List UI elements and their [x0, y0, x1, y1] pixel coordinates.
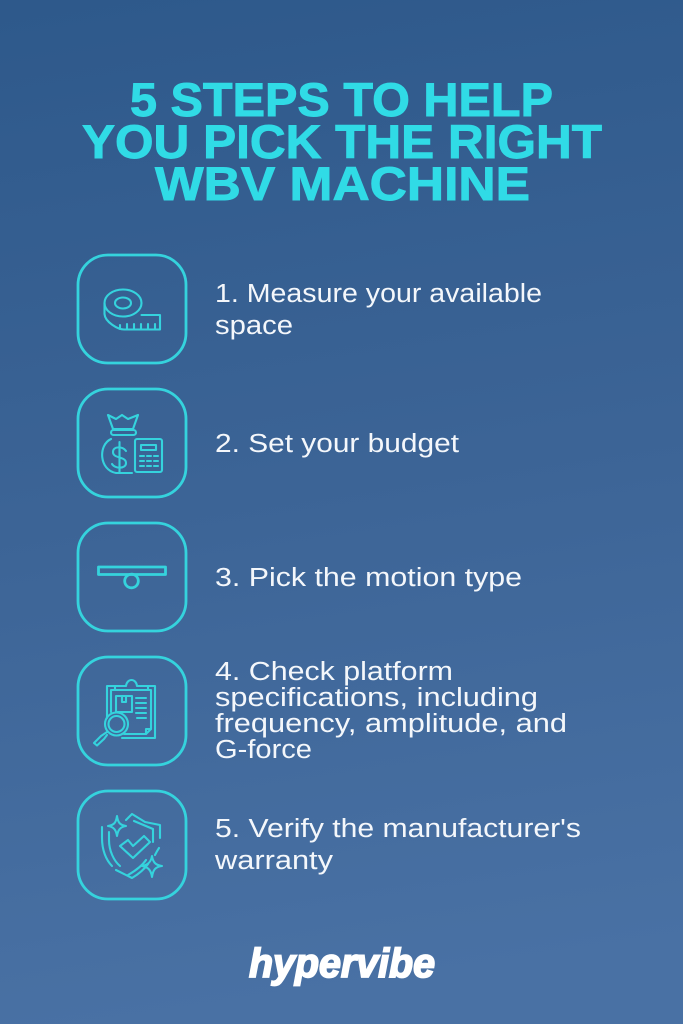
step 4 text: G-force	[215, 736, 312, 764]
step 5 text	[214, 815, 581, 875]
title: WBV MACHINE	[155, 157, 530, 210]
step 4 text: specifications, including	[215, 684, 538, 712]
title: 5 STEPS TO HELP	[130, 73, 553, 126]
step 4 text: 4. Check platform	[215, 658, 453, 686]
icon: pivoting platform	[78, 523, 186, 631]
step 4: platform specifications	[78, 657, 567, 765]
step 4 text	[215, 658, 567, 764]
step 1: measure space	[78, 255, 542, 363]
step 2: budget	[78, 389, 459, 497]
title	[82, 73, 602, 210]
icon: shield with check and sparkles	[78, 791, 186, 899]
step 5 text: 5. Verify the manufacturer's	[215, 815, 581, 843]
logo: hypervibe: hypervibe	[249, 940, 435, 986]
step 2 text: 2. Set your budget	[215, 430, 459, 458]
icon: money bag and calculator	[78, 389, 186, 497]
step 5 text: warranty	[214, 847, 333, 875]
step 1 text: space	[215, 312, 293, 340]
step 5: warranty	[78, 791, 581, 899]
step 3 text: 3. Pick the motion type	[215, 564, 522, 592]
step 4 text: frequency, amplitude, and	[215, 710, 567, 738]
step 3: motion type	[78, 523, 522, 631]
step 1 text: 1. Measure your available	[215, 280, 542, 308]
step 1 text	[215, 280, 542, 340]
title: YOU PICK THE RIGHT	[82, 115, 602, 168]
icon: measuring tape	[78, 255, 186, 363]
icon: clipboard and magnifier	[78, 657, 186, 765]
